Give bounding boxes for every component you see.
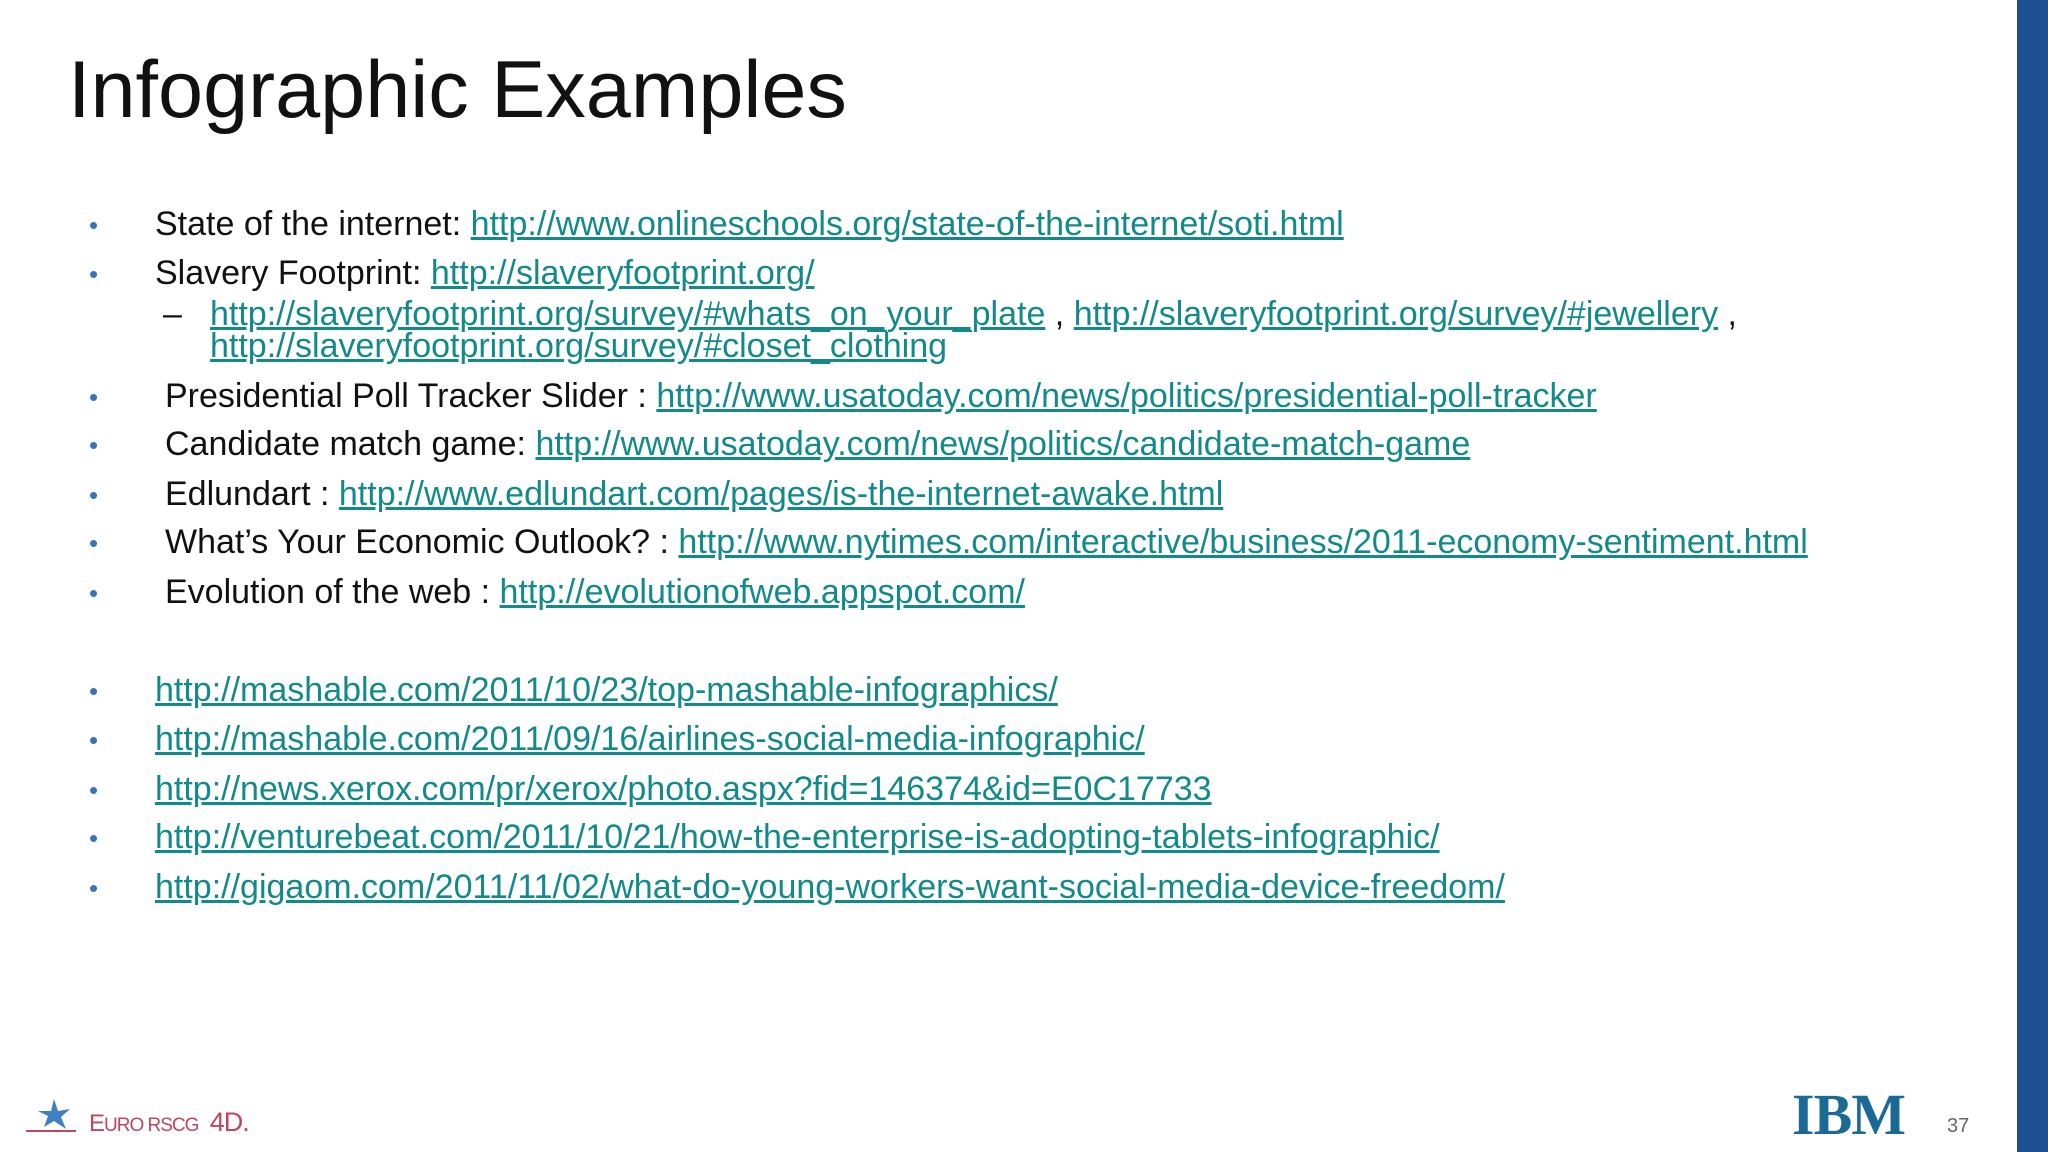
bullet list: Presidential Poll Tracker Slider : http://www.usatoday.com/news/politics/presidential-poll-tracker — [165, 377, 1597, 415]
logo: IBM: IBM — [1792, 1082, 1905, 1147]
bullet list — [89, 205, 1808, 906]
bullet list: • — [89, 430, 98, 460]
bullet list: State of the internet: http://www.onlineschools.org/state-of-the-internet/soti.html — [155, 205, 1344, 243]
bullet list: • — [89, 382, 98, 412]
bullet list: – — [163, 295, 182, 333]
bullet list: Evolution of the web : http://evolutionofweb.appspot.com/ — [165, 573, 1025, 611]
bullet list: • — [89, 725, 98, 755]
bullet list: http://venturebeat.com/2011/10/21/how-the-enterprise-is-adopting-tablets-infographic/ — [155, 818, 1440, 856]
bullet list: Slavery Footprint: http://slaveryfootprint.org/ — [155, 254, 815, 292]
bullet list: • — [89, 578, 98, 608]
bullet list: • — [89, 823, 98, 853]
bullet list: http://mashable.com/2011/10/23/top-mashable-infographics/ — [155, 671, 1058, 709]
bullet list: • — [89, 873, 98, 903]
bullet list: Candidate match game: http://www.usatoday.com/news/politics/candidate-match-game — [165, 425, 1470, 463]
bullet list: Edlundart : http://www.edlundart.com/pages/is-the-internet-awake.html — [165, 475, 1223, 513]
right blue bar — [2017, 0, 2048, 1152]
logo: Euro RSCG 4D: EURO RSCG 4D. — [89, 1107, 249, 1137]
bullet list: http://slaveryfootprint.org/survey/#whats_on_your_plate , http://slaveryfootprint.org/survey/#jewellery , — [210, 295, 1737, 333]
bullet list: • — [89, 676, 98, 706]
bullet list: http://gigaom.com/2011/11/02/what-do-young-workers-want-social-media-device-freedom/ — [155, 868, 1505, 906]
bullet list: • — [89, 775, 98, 805]
title: Infographic Examples — [68, 45, 847, 135]
bullet list: • — [89, 480, 98, 510]
bullet list: • — [89, 259, 98, 289]
logo: Euro RSCG 4D — [26, 1099, 249, 1137]
bullet list: http://slaveryfootprint.org/survey/#closet_clothing — [210, 327, 947, 365]
bullet list: http://news.xerox.com/pr/xerox/photo.aspx?fid=146374&id=E0C17733 — [155, 770, 1212, 808]
bullet list: What’s Your Economic Outlook? : http://www.nytimes.com/interactive/business/2011-economy-sentiment.html — [165, 523, 1808, 561]
bullet list: http://mashable.com/2011/09/16/airlines-social-media-infographic/ — [155, 720, 1145, 758]
bullet list: • — [89, 210, 98, 240]
page number: 37 — [1947, 1115, 1969, 1137]
bullet list: • — [89, 528, 98, 558]
